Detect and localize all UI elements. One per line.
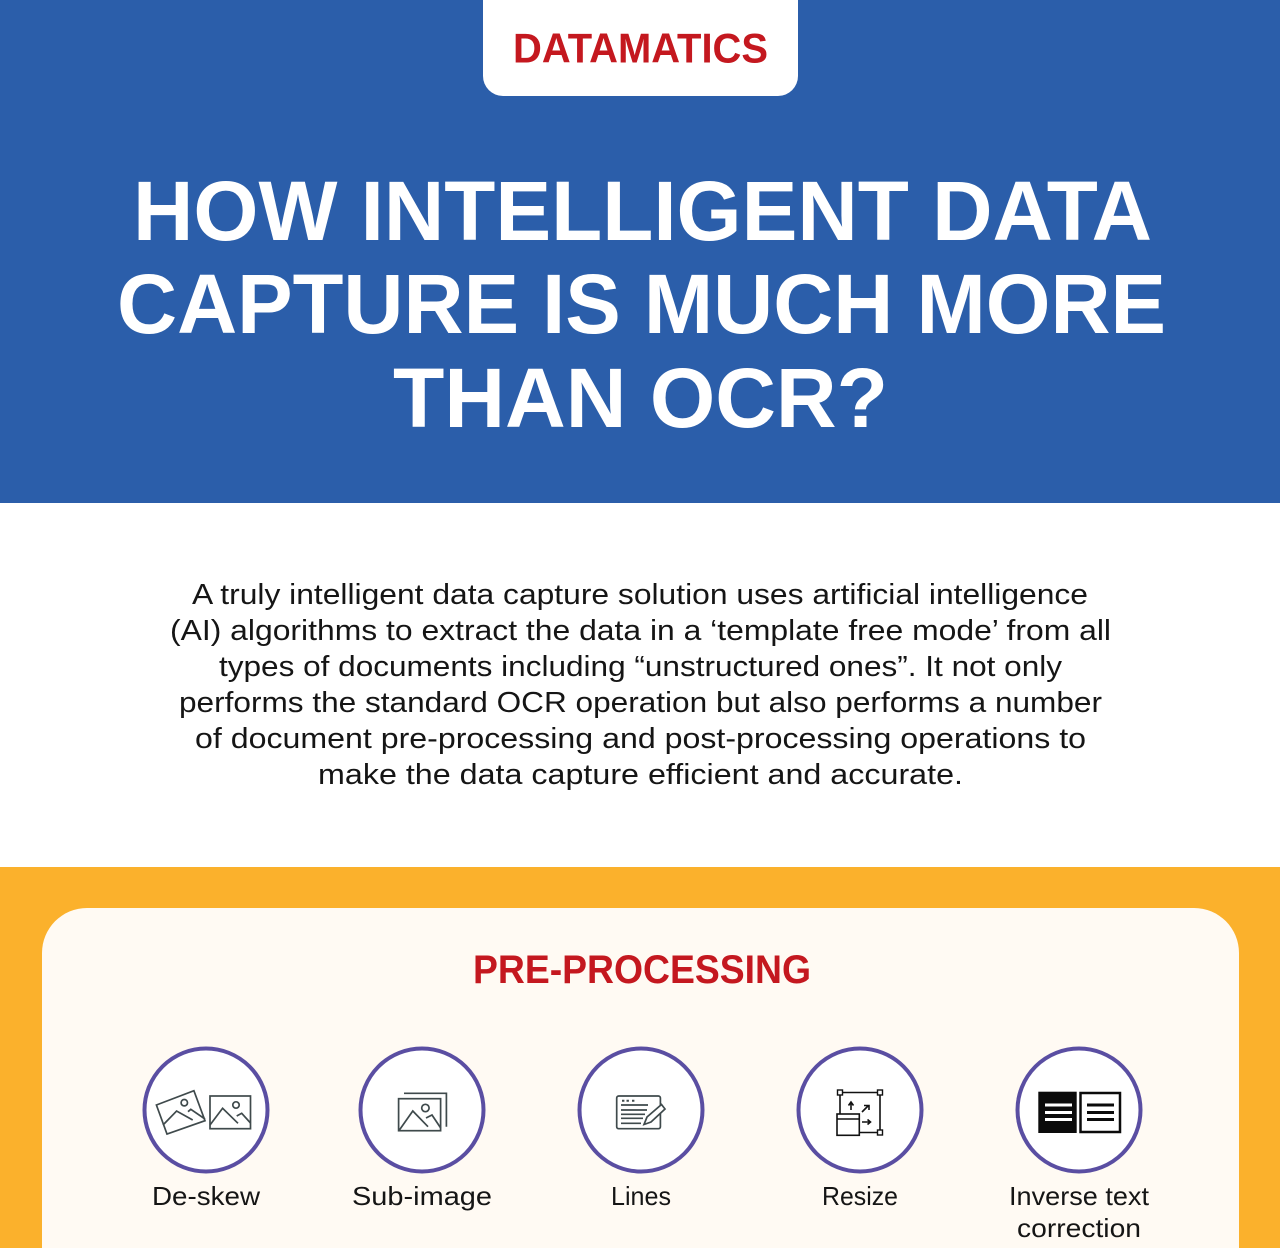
- icon: inverted and normal text blocks: [1038, 1092, 1120, 1133]
- header banner: [0, 0, 1280, 503]
- icon: skewed and straight images: [156, 1091, 250, 1134]
- label: De-skew: [152, 1181, 260, 1211]
- logo plate: [483, 0, 798, 96]
- item: de-skew: [144, 1048, 268, 1211]
- logo wordmark: DATAMATICS: [513, 24, 768, 72]
- intro paragraph: A truly intelligent data capture solution uses artificial intelligence: [192, 579, 1088, 611]
- intro paragraph: [170, 579, 1111, 791]
- intro paragraph: (AI) algorithms to extract the data in a ‘template free mode’ from all: [170, 615, 1111, 647]
- label: Sub-image: [352, 1181, 492, 1211]
- orange section background: [0, 867, 1280, 1248]
- panel: pre-processing: [42, 908, 1239, 1248]
- intro paragraph: performs the standard OCR operation but also performs a number: [179, 687, 1103, 719]
- intro paragraph: make the data capture efficient and accurate.: [318, 759, 963, 791]
- icon: stacked images: [399, 1093, 446, 1131]
- item: sub-image: [352, 1048, 492, 1211]
- item: lines: [580, 1048, 702, 1211]
- icon: text lines and pen: [617, 1096, 665, 1129]
- heading: pre-processing: PRE-PROCESSING: [473, 948, 811, 992]
- label: Inverse text: [1009, 1181, 1150, 1211]
- title: CAPTURE IS MUCH MORE: [117, 257, 1166, 351]
- title: HOW INTELLIGENT DATA: [133, 164, 1152, 258]
- label: correction: [1017, 1213, 1141, 1243]
- label: Lines: [611, 1181, 671, 1211]
- item: resize: [798, 1048, 922, 1211]
- item: inverse text correction: [1009, 1048, 1150, 1243]
- label: Resize: [822, 1181, 898, 1211]
- title: THAN OCR?: [393, 351, 888, 445]
- intro paragraph: of document pre-processing and post-processing operations to: [195, 723, 1086, 755]
- label: [1009, 1181, 1150, 1243]
- icon: resize window: [837, 1090, 882, 1135]
- intro paragraph: types of documents including “unstructured ones”. It not only: [219, 651, 1063, 683]
- title: [117, 164, 1166, 445]
